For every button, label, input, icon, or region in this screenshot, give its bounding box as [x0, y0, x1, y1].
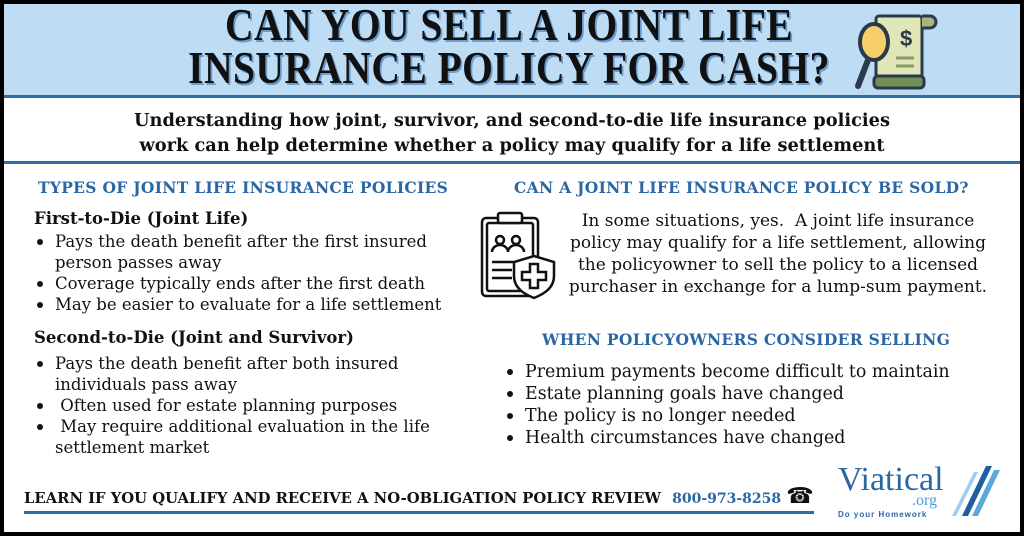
title	[188, 0, 830, 93]
list: second to die	[37, 354, 430, 457]
logo: Viatical.org: .org	[912, 492, 937, 509]
list: reasons: Health circumstances have changed	[525, 428, 845, 448]
paragraph: can be sold: purchaser in exchange for a lump-sum payment.	[569, 277, 987, 297]
list: second to die: Often used for estate planning purposes	[60, 396, 397, 415]
list: first to die: person passes away	[55, 253, 221, 272]
paragraph: can be sold	[569, 211, 987, 297]
header band	[4, 4, 1020, 98]
list: second to die: May require additional evaluation in the life	[60, 417, 430, 436]
subtitle: work can help determine whether a policy may qualify for a life settlement	[139, 135, 885, 156]
list: first to die: May be easier to evaluate for a life settlement	[55, 295, 441, 314]
subtitle	[4, 102, 1020, 164]
list: second to die: Pays the death benefit after both insured	[55, 354, 398, 373]
list: reasons: Premium payments become difficult to maintain	[525, 362, 950, 382]
logo: Viatical.org: Do your Homework	[838, 510, 927, 519]
subheading: first to die: First-to-Die (Joint Life)	[34, 209, 248, 228]
list: reasons: Estate planning goals have changed	[525, 384, 844, 404]
logo: Viatical.org	[838, 461, 1000, 519]
icon: clipboard with shield	[480, 212, 556, 300]
heading: can it be sold: CAN A JOINT LIFE INSURANCE POLICY BE SOLD?	[514, 178, 969, 197]
list: second to die: individuals pass away	[55, 375, 237, 394]
icon: money scroll with magnifier: $	[900, 26, 912, 51]
title: CAN YOU SELL A JOINT LIFE	[225, 0, 793, 50]
list: first to die: Pays the death benefit after the first insured	[55, 232, 427, 251]
subtitle: Understanding how joint, survivor, and second-to-die life insurance policies	[134, 110, 890, 131]
footer call to action: LEARN IF YOU QUALIFY AND RECEIVE A NO-OBLIGATION POLICY REVIEW 800-973-8258 ☎	[24, 484, 814, 509]
heading: types: TYPES OF JOINT LIFE INSURANCE POLICIES	[38, 178, 448, 197]
left panel: types	[34, 178, 448, 457]
heading: when consider selling: WHEN POLICYOWNERS CONSIDER SELLING	[542, 330, 950, 349]
title: INSURANCE POLICY FOR CASH?	[188, 42, 830, 93]
list: second to die: settlement market	[55, 438, 209, 457]
icon: money scroll with magnifier	[855, 14, 938, 90]
paragraph: can be sold: policy may qualify for a life settlement, allowing	[570, 233, 986, 253]
paragraph: can be sold: In some situations, yes. A joint life insurance	[582, 211, 974, 231]
list: reasons	[507, 362, 950, 448]
list: first to die	[37, 232, 442, 314]
list: first to die: Coverage typically ends after the first death	[55, 274, 425, 293]
list: reasons: The policy is no longer needed	[525, 406, 796, 426]
paragraph: can be sold: the policyowner to sell the policy to a licensed	[578, 255, 978, 275]
subheading: second to die: Second-to-Die (Joint and Survivor)	[34, 328, 354, 347]
logo: Viatical.org: Viatical	[838, 461, 944, 498]
